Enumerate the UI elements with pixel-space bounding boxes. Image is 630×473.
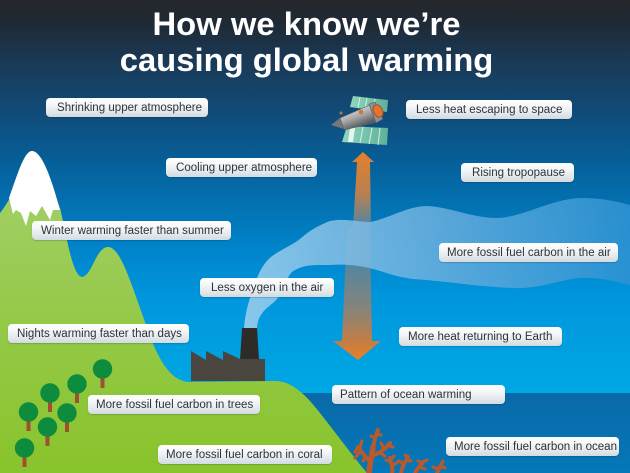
label: less heat escaping xyxy=(406,100,572,119)
label: rising tropopause xyxy=(461,163,574,182)
label: cooling upper atmosphere: Cooling upper atmosphere xyxy=(176,162,312,174)
satellite body xyxy=(340,105,377,130)
label: more heat returning xyxy=(399,327,562,346)
satellite lens xyxy=(371,103,385,119)
label: carbon in trees xyxy=(88,395,260,414)
factory building xyxy=(191,351,265,381)
label: less oxygen xyxy=(200,278,334,297)
label: ocean warming pattern: Pattern of ocean warming xyxy=(340,389,472,401)
label: carbon in coral: More fossil fuel carbon in coral xyxy=(166,449,323,461)
label: shrinking upper atmosphere: Shrinking upper atmosphere xyxy=(57,102,202,114)
title line 2: causing global warming xyxy=(120,41,493,78)
label: winter warming xyxy=(32,221,231,240)
label: nights warming: Nights warming faster than days xyxy=(17,328,182,340)
arrow up: heat escaping xyxy=(352,152,374,228)
label: carbon in ocean xyxy=(446,437,619,456)
mountains and hillside xyxy=(0,151,367,473)
ocean xyxy=(0,393,630,473)
title xyxy=(120,5,493,78)
title line 1: How we know we’re xyxy=(152,5,460,42)
lower solar panel xyxy=(342,126,388,145)
label: nights warming xyxy=(8,324,189,343)
label: ocean warming pattern xyxy=(332,385,505,404)
coral xyxy=(355,430,445,473)
satellite antenna xyxy=(331,118,344,129)
label: carbon in trees: More fossil fuel carbon in trees xyxy=(96,399,253,411)
label: less heat escaping: Less heat escaping to space xyxy=(416,104,562,116)
label: more heat returning: More heat returning to Earth xyxy=(408,331,552,343)
label: rising tropopause: Rising tropopause xyxy=(472,167,565,179)
factory chimney xyxy=(240,328,259,360)
label: carbon in ocean: More fossil fuel carbon in ocean xyxy=(454,441,617,453)
label: shrinking upper atmosphere xyxy=(46,98,208,117)
satellite xyxy=(331,96,388,145)
label: carbon in air: More fossil fuel carbon in the air xyxy=(447,247,611,259)
factory xyxy=(191,328,265,381)
trees xyxy=(15,359,112,467)
label: carbon in coral xyxy=(158,445,332,464)
label: carbon in air xyxy=(439,243,618,262)
label: cooling upper atmosphere xyxy=(166,158,317,177)
arrow down: heat returning xyxy=(333,228,381,360)
label: winter warming: Winter warming faster than summer xyxy=(41,225,224,237)
upper solar panel xyxy=(350,96,388,112)
smoke and carbon plume xyxy=(244,198,630,328)
snow cap xyxy=(9,151,60,226)
satellite collar xyxy=(369,102,383,123)
label: less oxygen: Less oxygen in the air xyxy=(211,282,323,294)
